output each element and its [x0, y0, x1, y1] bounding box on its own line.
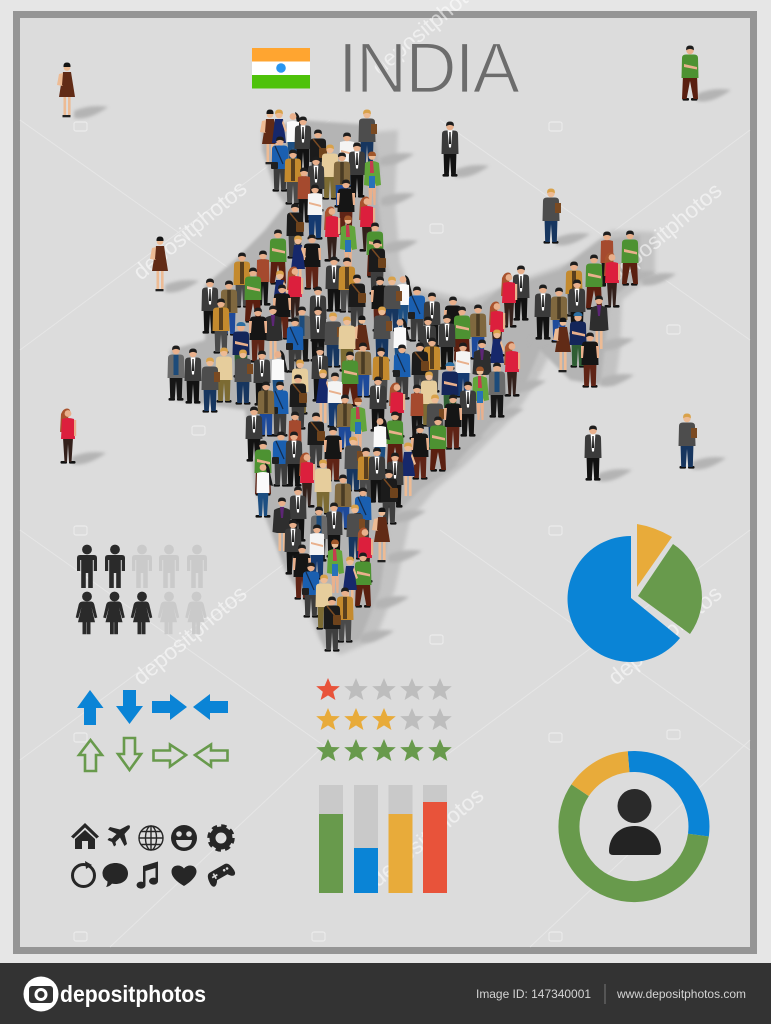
icon: game controller: [205, 861, 236, 888]
title flag: [252, 48, 310, 88]
pie chart: [568, 524, 702, 662]
watermarks: depositphotos: [365, 783, 489, 892]
icon: music note: [137, 862, 158, 889]
five star row: [316, 739, 452, 761]
map silhouette under crowd: [170, 120, 640, 650]
one star row: [316, 678, 452, 700]
icon: heart: [171, 865, 197, 886]
title: INDIA: [338, 30, 521, 108]
icon grid: [71, 823, 236, 889]
footer logo: [24, 976, 206, 1012]
star ratings: [316, 678, 452, 761]
footer website: www.depositphotos.com: [616, 987, 746, 1001]
map shadow: [262, 130, 655, 655]
crowd edge shadows: [360, 153, 676, 643]
icon: gear: [209, 826, 233, 850]
crowd forming map of India: [168, 110, 638, 652]
footer divider: [604, 984, 606, 1004]
icon: speech bubble: [102, 863, 128, 887]
solid blue arrows: [77, 690, 228, 725]
three star row: [316, 708, 452, 730]
donut chart with person icon: [569, 761, 699, 892]
footer image id: Image ID: 147340001: [476, 987, 591, 1001]
outlined green arrows: [79, 738, 228, 771]
watermarks: depositphotos: [128, 176, 252, 285]
footer logo: depositphotos: [60, 981, 206, 1007]
watermarks: depositphotos: [128, 581, 252, 690]
watermarks: depositphotos: [603, 178, 727, 287]
icon: globe: [139, 826, 163, 850]
pictogram people row: men: [77, 545, 207, 588]
pictogram people row: women: [76, 592, 207, 634]
icon: plane: [108, 825, 130, 846]
icon: smiley: [171, 825, 197, 851]
icon: refresh: [72, 861, 94, 886]
watermark camera marks: [74, 122, 680, 941]
bar chart: [319, 785, 447, 893]
footer bar: [0, 963, 771, 1024]
standalone people with shadows: [57, 46, 731, 482]
watermarks: depositphotos: [603, 581, 727, 690]
icon: home: [71, 823, 99, 849]
